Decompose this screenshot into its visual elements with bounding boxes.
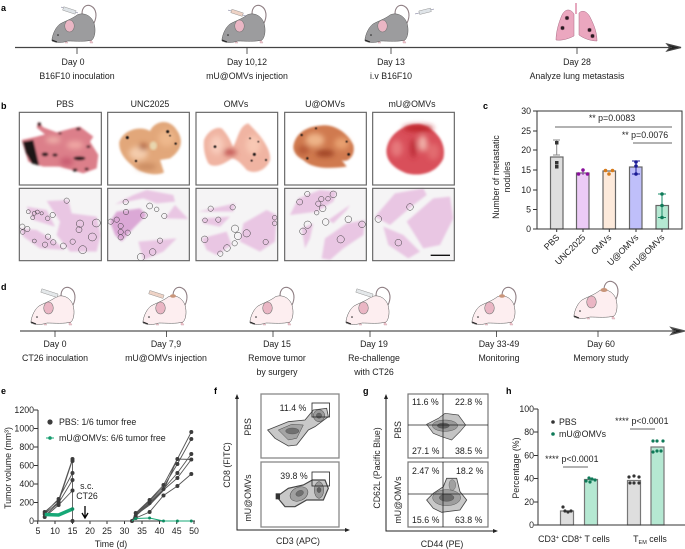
labels timeline a — [39, 57, 625, 81]
tick labels: 15 — [68, 526, 77, 536]
quadrant frames — [408, 394, 488, 527]
x labels: UNC2025 — [553, 232, 587, 267]
gates — [312, 403, 330, 486]
histology sections — [19, 188, 454, 261]
labels timeline d: Day 7,9 — [151, 339, 181, 349]
tick labels: 30 — [120, 526, 129, 536]
mU@OMVs lines — [45, 509, 191, 521]
timeline arrow a — [15, 44, 681, 51]
y axis title — [491, 135, 512, 219]
tick labels: 600 — [19, 460, 34, 470]
lung photographs — [19, 112, 454, 185]
icon: mouse, day 60 — [574, 281, 618, 319]
column titles: OMVs — [224, 99, 249, 109]
labels — [372, 421, 463, 549]
legend: mU@OMVs: 6/6 tumor free — [59, 433, 166, 443]
icon: syringe, day 0 — [41, 289, 58, 297]
labels: 39.8 % — [280, 471, 308, 481]
icon: grey mouse with syringe, day 0 — [52, 5, 96, 43]
labels timeline d: Day 33-49 — [479, 339, 519, 349]
x labels: OMVs — [589, 232, 614, 257]
icon: mouse, day 19 — [346, 287, 390, 325]
axis titles: Time (d) — [95, 539, 127, 549]
significance brackets — [555, 113, 672, 143]
y axis title: Number of metastatic — [491, 135, 501, 219]
quadrant percentages: 27.1 % — [412, 446, 440, 456]
tick labels: 5 — [36, 526, 41, 536]
y tick labels: 10 — [521, 185, 531, 195]
x labels — [538, 534, 667, 546]
quadrant percentages: 22.8 % — [455, 397, 483, 407]
y tick labels: 0 — [526, 224, 531, 234]
labels timeline d: Monitoring — [478, 353, 520, 363]
labels timeline a: Day 0 — [62, 57, 85, 67]
labels: PBS — [393, 421, 403, 439]
quadrant percentages — [412, 397, 484, 525]
panel label e: e — [1, 386, 6, 396]
x labels: cells — [647, 534, 667, 544]
x labels: PBS — [542, 232, 562, 252]
icon: mouse, day 15 — [250, 287, 294, 325]
x labels: U@OMVs — [605, 232, 641, 268]
PBS points — [43, 430, 193, 523]
column titles: UNC2025 — [131, 99, 169, 109]
panel label b: b — [1, 101, 7, 111]
tick labels: 1200 — [14, 405, 34, 415]
significance: p<0.0001 — [632, 416, 669, 426]
icon: mouse, day 0 — [31, 287, 75, 325]
axes — [534, 409, 685, 525]
y tick labels: 30 — [521, 106, 531, 116]
tick labels: 25 — [102, 526, 112, 536]
significance: **** — [615, 416, 629, 426]
column titles — [56, 99, 436, 109]
legend — [551, 417, 607, 439]
flow plot frames — [261, 394, 339, 527]
x labels: T cells — [582, 534, 610, 544]
labels timeline a: mU@OMVs injection — [206, 71, 288, 81]
error bars and points — [553, 140, 666, 219]
quadrant percentages: 2.47 % — [412, 466, 440, 476]
y tick labels — [521, 106, 531, 234]
axes arrows — [235, 394, 350, 532]
legend — [46, 417, 166, 443]
tick labels: 80 — [524, 427, 534, 437]
labels timeline d: CT26 inoculation — [22, 353, 88, 363]
labels — [222, 403, 320, 546]
panel label a: a — [1, 3, 7, 13]
significance brackets: ** p=0.0076 — [622, 130, 668, 140]
panel: flow plots f — [222, 394, 350, 546]
labels: CD62L (Pacific Blue) — [372, 427, 382, 509]
quadrant contours — [427, 413, 467, 512]
tick labels: 60 — [524, 450, 534, 460]
x labels: EM — [639, 540, 647, 546]
x labels: CD3 — [538, 534, 556, 544]
icon: mouse, day 33 — [472, 287, 516, 325]
labels timeline d: Re-challenge — [348, 353, 400, 363]
panel label f: f — [214, 386, 218, 396]
labels timeline a: Day 10,12 — [227, 57, 267, 67]
panel label c: c — [483, 101, 488, 111]
y tick labels: 15 — [521, 165, 531, 175]
x labels: mU@OMVs — [626, 232, 667, 273]
panel: flow plots g — [372, 394, 498, 549]
panel label d: d — [1, 282, 6, 292]
annotation s.c. CT26 with arrow: CT26 — [76, 491, 98, 501]
annotation s.c. CT26 with arrow — [76, 481, 98, 518]
panel label h: h — [506, 386, 512, 396]
panel: timeline d — [20, 281, 685, 377]
tick labels: 0 — [529, 520, 534, 530]
annotation s.c. CT26 with arrow: s.c. — [80, 481, 94, 491]
quadrant percentages: 15.6 % — [412, 515, 440, 525]
labels: mU@OMVs — [393, 476, 403, 524]
green points — [584, 439, 665, 484]
labels: mU@OMVs — [243, 474, 253, 522]
tick labels: 40 — [155, 526, 164, 536]
labels timeline d: Day 19 — [360, 339, 388, 349]
legend: mU@OMVs — [559, 429, 607, 439]
significance — [545, 416, 669, 467]
icon: grey mouse with syringe, day 13 — [365, 5, 434, 43]
labels timeline a: B16F10 inoculation — [39, 71, 115, 81]
column titles: mU@OMVs — [388, 99, 436, 109]
timeline arrow d — [20, 328, 685, 334]
quadrant percentages: 38.5 % — [455, 446, 483, 456]
tick labels: 400 — [19, 479, 34, 489]
tick labels — [14, 405, 199, 536]
axes — [34, 410, 195, 524]
tick labels: 200 — [19, 498, 34, 508]
icon: grey mouse with syringe, day 10 — [222, 5, 266, 43]
y tick labels: 5 — [526, 204, 531, 214]
panel: line chart e — [3, 405, 199, 549]
quadrant percentages: 18.2 % — [456, 466, 484, 476]
labels timeline d: Remove tumor — [248, 353, 306, 363]
panel: bar chart h — [511, 404, 685, 546]
tick labels: 40 — [524, 474, 534, 484]
labels timeline d — [22, 339, 629, 377]
labels timeline d: Day 60 — [587, 339, 615, 349]
tick labels: 100 — [519, 404, 534, 414]
icon: lungs — [556, 3, 597, 41]
tick labels: 10 — [50, 526, 60, 536]
labels timeline a: i.v B16F10 — [370, 71, 412, 81]
quadrant percentages: 63.8 % — [455, 515, 483, 525]
panel: bar chart c — [491, 106, 682, 273]
tick labels: 20 — [524, 497, 534, 507]
legend: PBS: 1/6 tumor free — [59, 417, 136, 427]
panel: lung images — [19, 99, 454, 261]
icon: syringe, day 19 — [356, 289, 373, 297]
labels timeline d: by surgery — [256, 367, 298, 377]
axis titles — [3, 427, 127, 549]
mU@OMVs points — [71, 507, 193, 522]
x labels: + — [556, 535, 559, 541]
x labels: CD8 — [559, 534, 579, 544]
y tick labels: 25 — [521, 126, 531, 136]
column titles: U@OMVs — [305, 99, 345, 109]
labels: PBS — [243, 418, 253, 436]
icon: mouse, day 7 — [143, 287, 187, 325]
PBS lines — [45, 432, 191, 521]
icon: syringe, day 7 — [149, 290, 164, 298]
axes arrows — [384, 394, 498, 533]
significance brackets: ** p=0.0083 — [589, 113, 635, 123]
labels: 11.4 % — [280, 403, 307, 413]
x labels: + — [579, 535, 582, 541]
tick labels — [519, 404, 534, 530]
labels timeline a: Day 28 — [563, 57, 591, 67]
labels timeline a: Day 13 — [377, 57, 405, 67]
significance: **** — [545, 454, 559, 464]
labels timeline d: Memory study — [573, 353, 629, 363]
axes — [533, 111, 682, 232]
labels timeline a: Analyze lung metastasis — [530, 71, 625, 81]
labels timeline d: Day 15 — [263, 339, 291, 349]
points — [561, 474, 641, 514]
box outlines — [19, 112, 454, 185]
tick labels: 45 — [172, 526, 182, 536]
legend: PBS — [559, 417, 577, 427]
labels: CD8 (FITC) — [222, 442, 232, 488]
axis titles: Tumor volume (mm³) — [3, 427, 13, 509]
bars — [560, 447, 664, 525]
panel: timeline a — [15, 3, 681, 81]
tick labels: 1000 — [14, 424, 34, 434]
bars — [550, 157, 668, 229]
tick labels: 35 — [137, 526, 147, 536]
labels timeline d: Day 0 — [44, 339, 67, 349]
labels timeline d: mU@OMVs injection — [125, 353, 207, 363]
y tick labels: 20 — [521, 145, 531, 155]
x labels — [542, 232, 667, 273]
x labels: T — [633, 534, 639, 544]
labels timeline d: with CT26 — [353, 367, 394, 377]
tick labels: 50 — [189, 526, 199, 536]
quadrant percentages: 11.6 % — [412, 397, 439, 407]
tick labels: 20 — [85, 526, 95, 536]
y axis title: nodules — [502, 161, 512, 192]
tick labels: 0 — [29, 516, 34, 526]
flow contour plots — [268, 408, 328, 507]
tick labels: 800 — [19, 442, 34, 452]
y axis title: Percentage (%) — [511, 437, 521, 499]
column titles: PBS — [56, 99, 74, 109]
significance: p<0.0001 — [562, 454, 599, 464]
panel label g: g — [363, 386, 368, 396]
labels: CD44 (PE) — [421, 539, 463, 549]
labels: CD3 (APC) — [276, 536, 320, 546]
